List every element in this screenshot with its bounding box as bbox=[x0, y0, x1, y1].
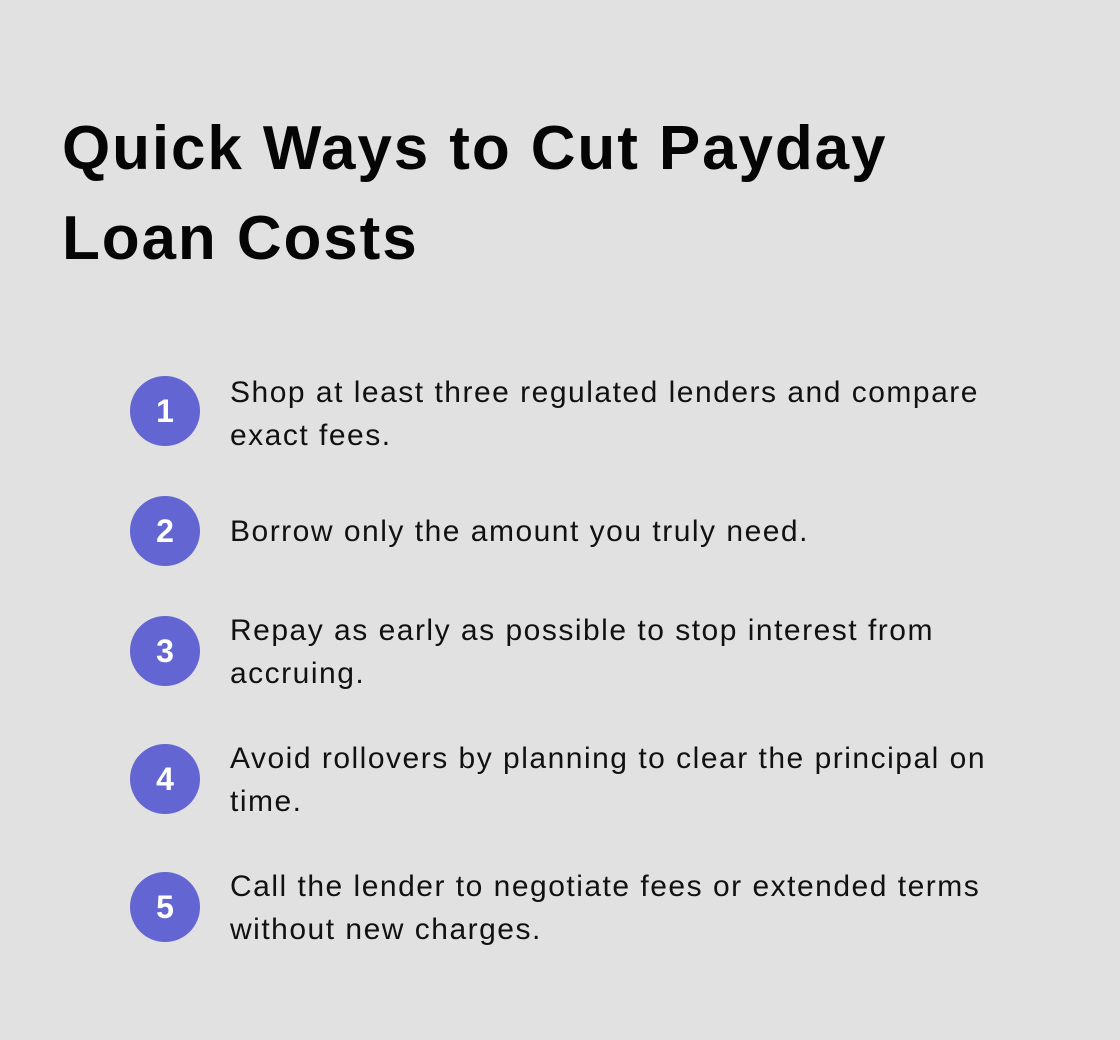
circle 5 bbox=[130, 872, 200, 942]
text 4 bbox=[230, 742, 986, 818]
text 3: accruing. bbox=[230, 657, 365, 690]
text 1 bbox=[230, 376, 979, 452]
circle 4 bbox=[130, 744, 200, 814]
title: Loan Costs bbox=[62, 204, 419, 273]
circle 4: 4 bbox=[156, 761, 174, 797]
circle 3 bbox=[130, 616, 200, 686]
circle 1: 1 bbox=[156, 393, 174, 429]
title bbox=[62, 114, 887, 273]
circle 1 bbox=[130, 376, 200, 446]
text 1: exact fees. bbox=[230, 419, 392, 452]
item 3 bbox=[130, 614, 934, 690]
circle 2: 2 bbox=[156, 513, 174, 549]
title: Quick Ways to Cut Payday bbox=[62, 114, 887, 183]
text 5: without new charges. bbox=[230, 913, 542, 946]
circle 5: 5 bbox=[156, 889, 174, 925]
circle 2 bbox=[130, 496, 200, 566]
item 2 bbox=[130, 496, 809, 566]
item 4 bbox=[130, 742, 986, 818]
item 1 bbox=[130, 376, 979, 452]
text 5 bbox=[230, 870, 980, 946]
text 1: Shop at least three regulated lenders and compare bbox=[230, 376, 979, 409]
text 2: Borrow only the amount you truly need. bbox=[230, 515, 809, 548]
circle 3: 3 bbox=[156, 633, 174, 669]
text 5: Call the lender to negotiate fees or extended terms bbox=[230, 870, 980, 903]
text 3 bbox=[230, 614, 934, 690]
text 3: Repay as early as possible to stop interest from bbox=[230, 614, 934, 647]
text 4: Avoid rollovers by planning to clear the principal on bbox=[230, 742, 986, 775]
item 5 bbox=[130, 870, 980, 946]
text 4: time. bbox=[230, 785, 303, 818]
